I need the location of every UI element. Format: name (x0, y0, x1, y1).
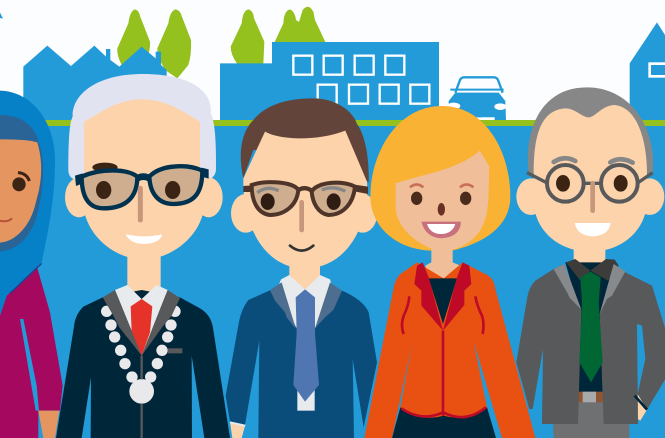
mouth (421, 222, 461, 238)
chain (101, 306, 181, 404)
hand (638, 394, 647, 421)
robe (0, 266, 63, 438)
person: man in blue suit (226, 98, 377, 438)
glasses (243, 182, 368, 215)
glasses (75, 166, 209, 208)
face (83, 99, 205, 259)
person: woman with orange jacket (364, 106, 535, 438)
trees (117, 7, 326, 78)
houses left (23, 46, 167, 120)
jacket right front (600, 264, 665, 424)
face (534, 105, 647, 252)
skirt, jacket and lapels (364, 262, 535, 438)
hand (230, 422, 245, 438)
ears and hair (68, 74, 216, 180)
person: man in grey suit (516, 87, 665, 438)
face (396, 151, 489, 249)
icon: car (447, 77, 506, 120)
belt (578, 392, 604, 402)
person: mayor with chain (56, 74, 230, 438)
suit (226, 290, 377, 438)
person: woman in hijab (0, 91, 63, 438)
tie (579, 272, 603, 382)
office building (220, 42, 439, 120)
trousers (553, 402, 629, 438)
hair (528, 87, 653, 173)
hair (241, 98, 369, 183)
jacket left front (516, 264, 581, 424)
collar and tie (115, 285, 168, 356)
neck (425, 248, 460, 278)
tie (293, 289, 319, 402)
neck (127, 253, 161, 297)
hijab (0, 91, 55, 316)
hair (370, 106, 510, 251)
glasses (527, 165, 653, 202)
jacket (56, 290, 230, 438)
eyebrows (92, 163, 118, 172)
face (243, 131, 367, 268)
face (0, 139, 41, 243)
house right (630, 22, 665, 120)
shirt (565, 262, 615, 392)
